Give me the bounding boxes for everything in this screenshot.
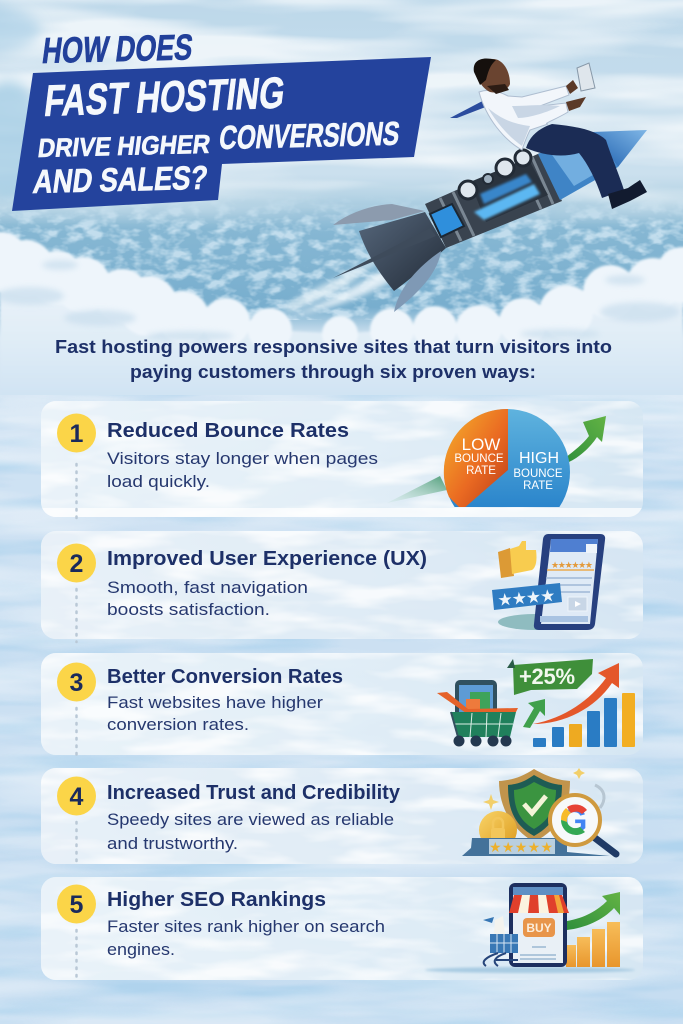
intro text: Fast hosting powers responsive sites that turn visitors into: [55, 337, 612, 357]
title banner: [12, 57, 431, 211]
growth arrow: [567, 892, 620, 930]
number badge 5: [57, 884, 96, 924]
number badge 4: [57, 776, 96, 816]
body text: [107, 810, 394, 853]
icon: shopping cart: [437, 680, 518, 746]
callout: +25%: +25%: [519, 664, 575, 689]
panel: reduced bounce rates: [41, 401, 643, 520]
number badge 3: 3: [70, 669, 83, 697]
small green arrow: [523, 699, 545, 728]
number badge 4: 4: [70, 783, 84, 811]
lower sky streaks: [0, 395, 683, 1024]
illustration: man riding a rocket: [290, 58, 647, 316]
icon: bounce rate pie and arrow: BOUNCE: [513, 468, 563, 480]
magnifier with g logo: G: [561, 802, 587, 840]
heading: Better Conversion Rates: [107, 665, 343, 688]
magnifier with g logo: [550, 785, 616, 854]
man: trousers and shoe: [526, 124, 647, 209]
icon: storefront phone and chart: [483, 883, 620, 967]
connector dots: [75, 822, 78, 866]
body text: [107, 693, 323, 734]
callout: +25%: [507, 659, 593, 695]
body text: load quickly.: [107, 472, 210, 491]
body text: Fast websites have higher: [107, 693, 323, 712]
body text: Speedy sites are viewed as reliable: [107, 810, 394, 829]
body text: boosts satisfaction.: [107, 600, 270, 619]
icon: phone with reviews: [492, 534, 605, 630]
clouds below the city: [0, 232, 683, 398]
icon: bounce rate pie and arrow: HIGH: [519, 450, 559, 467]
number badge 2: 2: [70, 550, 83, 578]
panel: increased trust and credibility: [41, 768, 643, 866]
rising bars: [566, 922, 620, 967]
man: shirt: [479, 86, 569, 150]
body text: Visitors stay longer when pages: [107, 449, 378, 468]
number badge 1: 1: [70, 420, 84, 448]
heading: Improved User Experience (UX): [107, 547, 427, 570]
star sparkles: [483, 768, 585, 810]
icon: bounce rate pie and arrow: [389, 409, 606, 507]
heading: Increased Trust and Credibility: [107, 781, 401, 804]
connector dots: [75, 464, 78, 520]
intro text: paying customers through six proven ways:: [130, 362, 536, 382]
body text: [107, 449, 378, 491]
rocket body: [425, 130, 647, 248]
rating platform: ★★★★★: [489, 839, 553, 855]
icon: bounce rate pie and arrow: BOUNCE: [454, 453, 504, 465]
body text: engines.: [107, 940, 175, 959]
thumbs up: [498, 541, 536, 578]
city haze: [0, 195, 683, 320]
title line: drive higher: DRIVE HIGHER: [36, 129, 212, 163]
icon: bounce rate pie and arrow: RATE: [466, 465, 496, 477]
heading: how does: HOW DOES: [40, 26, 195, 71]
heading: Higher SEO Rankings: [107, 888, 326, 911]
heading: Reduced Bounce Rates: [107, 419, 349, 442]
body text: Faster sites rank higher on search: [107, 917, 385, 936]
panel: better conversion rates: [41, 653, 643, 758]
panel: improved user experience: [41, 531, 643, 642]
number badge 5: 5: [70, 891, 84, 919]
number badge 1: [57, 414, 96, 452]
connector dots: [75, 930, 78, 978]
intro text: [55, 337, 612, 382]
bar chart: [533, 693, 635, 747]
star rating tag: ★★★★: [497, 586, 556, 610]
small cart: [483, 916, 518, 966]
rating platform: [462, 838, 610, 856]
panel: higher seo rankings: [41, 877, 643, 980]
phone storefront: BUY: [526, 921, 552, 935]
icon: trust badge: [462, 768, 616, 856]
man: tie: [450, 95, 501, 118]
icon: bounce rate pie and arrow: LOW: [462, 435, 500, 454]
rocket exhaust: [290, 258, 412, 316]
rocket fins: [333, 204, 446, 312]
body text: conversion rates.: [107, 715, 249, 734]
body text: Smooth, fast navigation: [107, 578, 308, 597]
title line: conversions: CONVERSIONS: [217, 116, 402, 157]
title line: fast hosting: FAST HOSTING: [42, 69, 288, 126]
lock coin: [479, 811, 517, 849]
man: head: [474, 58, 510, 94]
connector dots: [75, 589, 78, 642]
body text: [107, 917, 385, 959]
connector dots: [75, 708, 78, 758]
icon: bounce rate pie and arrow: RATE: [523, 480, 553, 492]
number badge 2: [57, 544, 96, 582]
title line: and sales: AND SALES?: [31, 160, 210, 201]
number badge 3: [57, 662, 96, 702]
icon: phone with reviews: ★★★★★★: [551, 560, 593, 570]
body text: [107, 578, 308, 619]
man: tablet and hands: [566, 63, 595, 111]
red growth arrow: [533, 663, 619, 724]
body text: and trustworthy.: [107, 834, 238, 853]
